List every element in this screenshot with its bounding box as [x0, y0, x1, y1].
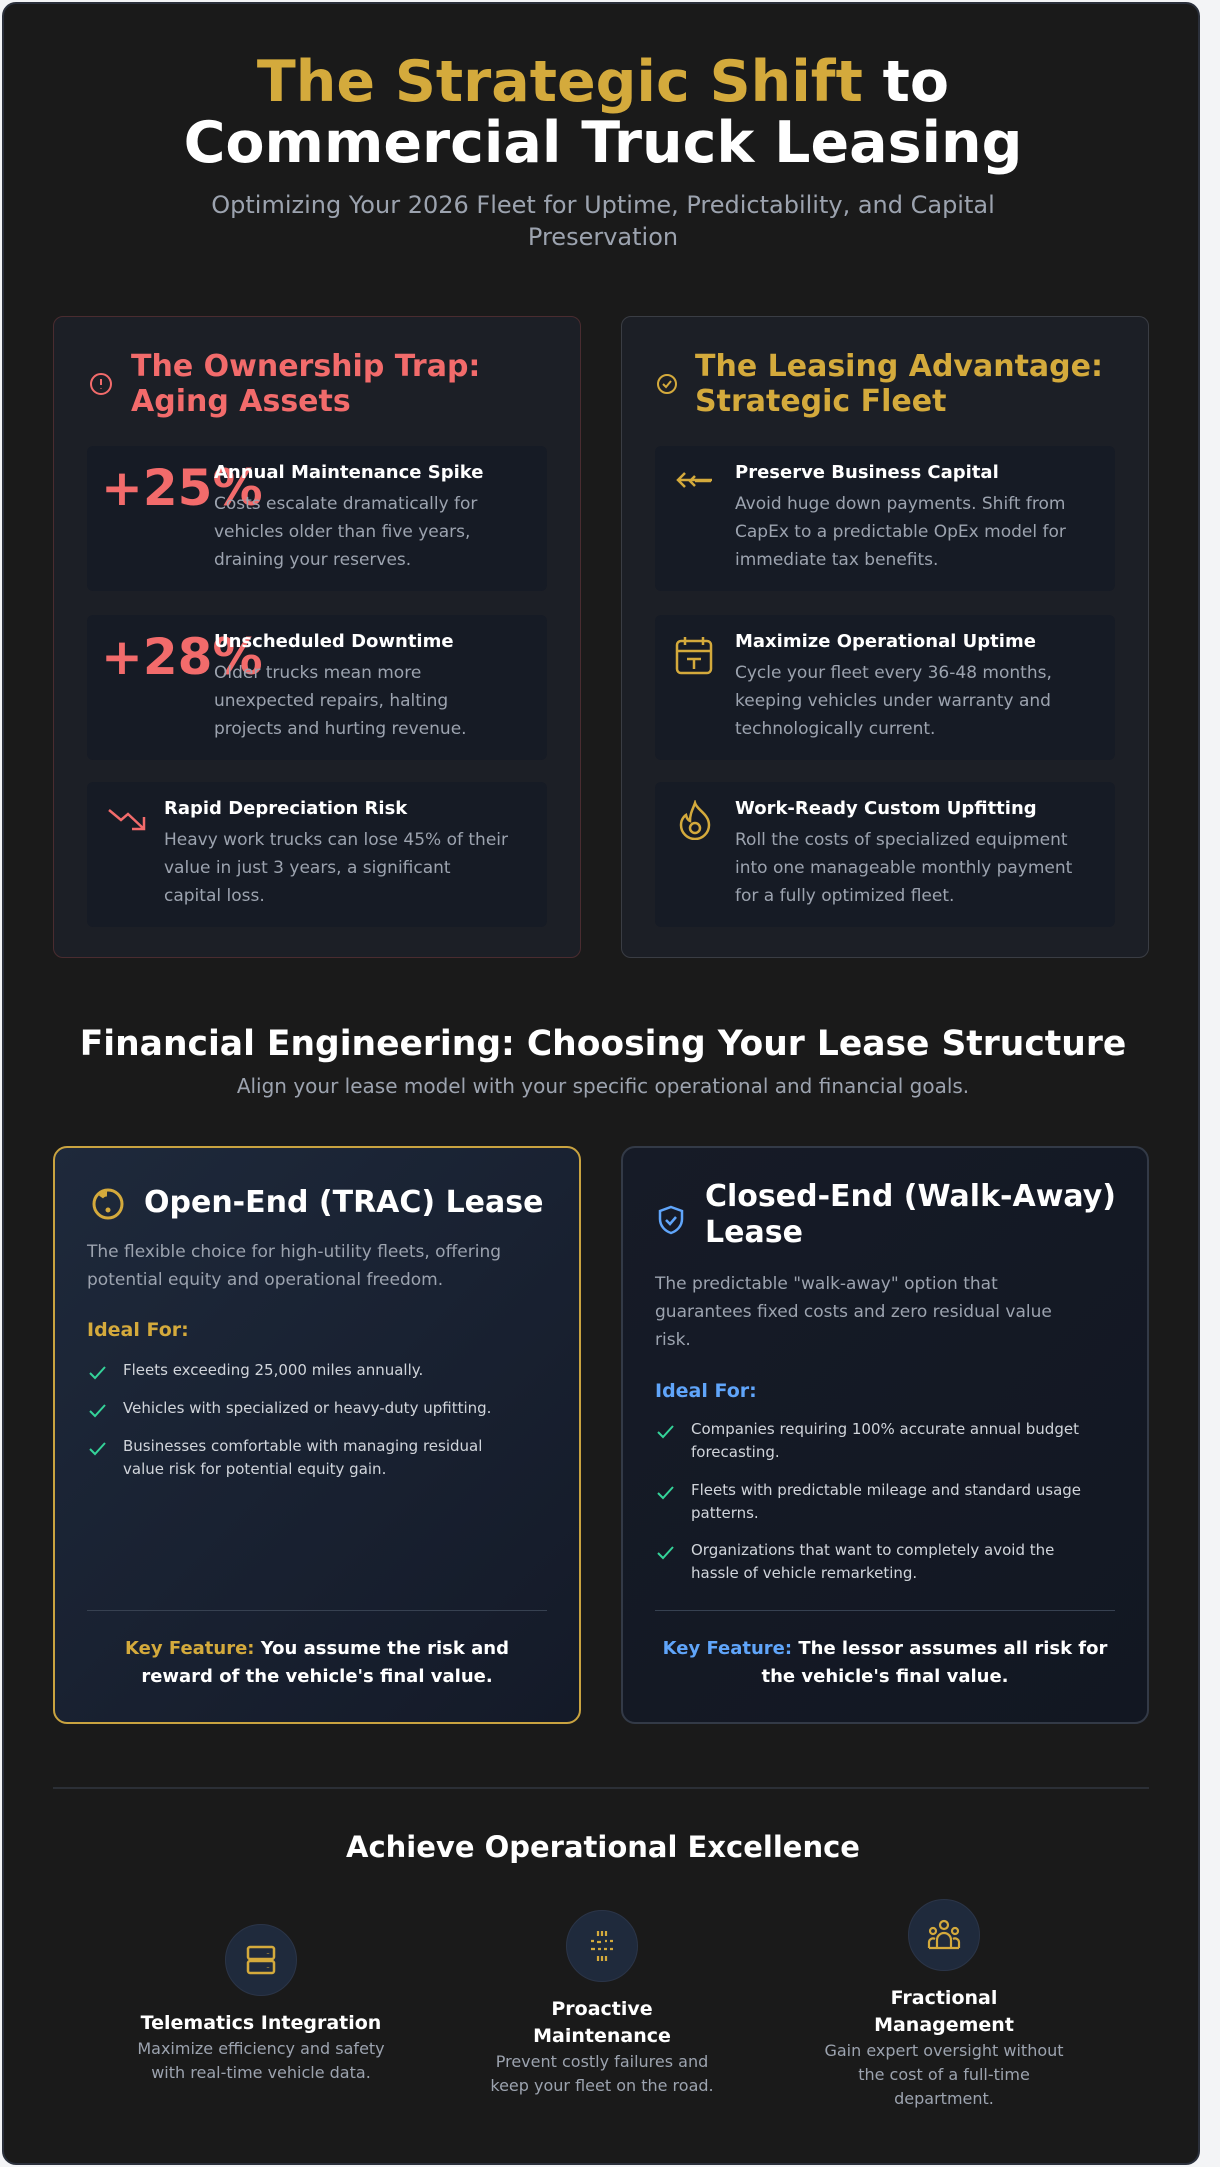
icon: check circle	[657, 374, 677, 394]
feature: telematics: Maximize efficiency and safety with real-time vehicle data.	[137, 2039, 385, 2082]
lease card: closed-end	[621, 1146, 1149, 1724]
key feature: Key Feature: You assume the risk and reward of the vehicle's final value.	[125, 1638, 509, 1687]
heading: Open-End (TRAC) Lease	[144, 1185, 543, 1220]
card: capital	[655, 446, 1115, 591]
section subtitle: Align your lease model with your specific operational and financial goals.	[237, 1074, 969, 1098]
card: depreciation	[87, 782, 547, 927]
feature: maintenance: Proactive	[551, 1998, 653, 2020]
section heading: financial engineering: Financial Engineering: Choosing Your Lease Structure	[80, 1024, 1126, 1064]
feature: maintenance	[490, 1910, 714, 2095]
card: uptime: Maximize Operational Uptime	[735, 631, 1036, 652]
title: The Strategic Shift to	[257, 49, 949, 115]
card: maintenance: +25%	[101, 459, 263, 517]
feature: telematics: Telematics Integration	[141, 2012, 381, 2034]
icon: users	[908, 1899, 980, 1971]
card: depreciation: Rapid Depreciation Risk	[164, 798, 407, 819]
list item: Fleets exceeding 25,000 miles annually.	[123, 1361, 423, 1379]
icon: cpu	[566, 1910, 638, 1982]
card: downtime: +28%	[101, 628, 263, 686]
title: Commercial Truck Leasing	[184, 110, 1022, 176]
card: maintenance: Costs escalate dramatically for vehicles older than five years, draining your reserves.	[214, 494, 477, 570]
card: downtime: Unscheduled Downtime	[214, 631, 454, 652]
heading: Closed-End (Walk-Away)	[705, 1179, 1116, 1214]
list item: Businesses comfortable with managing residual value risk for potential equity gain.	[123, 1437, 482, 1478]
card: depreciation: Heavy work trucks can lose 45% of their value in just 3 years, a significant capital loss.	[164, 830, 508, 906]
icon: alert	[90, 373, 112, 395]
list item: Vehicles with specialized or heavy-duty upfitting.	[123, 1399, 491, 1417]
feature: maintenance: Maintenance	[533, 2025, 671, 2047]
heading	[131, 349, 480, 419]
panel: leasing advantage	[621, 316, 1149, 958]
card: maintenance: Annual Maintenance Spike	[214, 462, 483, 483]
card: capital: Preserve Business Capital	[735, 462, 999, 483]
card: upfitting	[655, 782, 1115, 927]
card: downtime	[87, 615, 547, 760]
list item: Organizations that want to completely avoid the hassle of vehicle remarketing.	[691, 1541, 1054, 1582]
ideal for label: Ideal For:	[87, 1319, 189, 1341]
icon: shield	[658, 1206, 684, 1234]
card: uptime: Cycle your fleet every 36-48 months, keeping vehicles under warranty and technologically current.	[735, 663, 1052, 739]
key feature: Key Feature: The lessor assumes all risk for the vehicle's final value.	[663, 1638, 1107, 1687]
ideal for label: Ideal For:	[655, 1380, 757, 1402]
heading: operational excellence: Achieve Operational Excellence	[346, 1830, 860, 1864]
list item: Fleets with predictable mileage and standard usage patterns.	[691, 1481, 1081, 1522]
description: The predictable "walk-away" option that guarantees fixed costs and zero residual value risk.	[655, 1274, 1052, 1350]
icon: server	[225, 1924, 297, 1996]
heading: The Ownership Trap:	[131, 349, 480, 384]
card: uptime	[655, 615, 1115, 760]
feature: fractional management: Fractional	[891, 1987, 997, 2009]
feature: fractional management: Management	[874, 2014, 1014, 2036]
heading: Aging Assets	[131, 384, 351, 419]
subtitle: Optimizing Your 2026 Fleet for Uptime, Predictability, and Capital Preservation	[211, 191, 995, 251]
title	[184, 49, 1022, 176]
feature: telematics	[137, 1924, 385, 2082]
card: maintenance	[87, 446, 547, 591]
feature: maintenance: Prevent costly failures and keep your fleet on the road.	[490, 2052, 714, 2095]
heading	[695, 349, 1103, 419]
heading: The Leasing Advantage:	[695, 349, 1103, 384]
list item: Companies requiring 100% accurate annual budget forecasting.	[691, 1420, 1079, 1461]
card: upfitting: Work-Ready Custom Upfitting	[735, 798, 1037, 819]
feature: fractional management	[824, 1899, 1064, 2108]
lease card: open-end	[53, 1146, 581, 1724]
feature: fractional management: Gain expert oversight without the cost of a full-time department.	[824, 2041, 1064, 2108]
heading: Strategic Fleet	[695, 384, 946, 419]
heading	[705, 1179, 1116, 1250]
card: upfitting: Roll the costs of specialized equipment into one manageable monthly payment for a fully optimized fleet.	[735, 830, 1072, 906]
description: The flexible choice for high-utility fleets, offering potential equity and operational freedom.	[87, 1242, 501, 1290]
card: capital: Avoid huge down payments. Shift from CapEx to a predictable OpEx model for immediate tax benefits.	[735, 494, 1066, 570]
heading: Lease	[705, 1215, 803, 1250]
card: downtime: Older trucks mean more unexpected repairs, halting projects and hurting revenue.	[214, 663, 467, 739]
panel: ownership trap	[53, 316, 581, 958]
icon: gauge	[92, 1188, 124, 1220]
